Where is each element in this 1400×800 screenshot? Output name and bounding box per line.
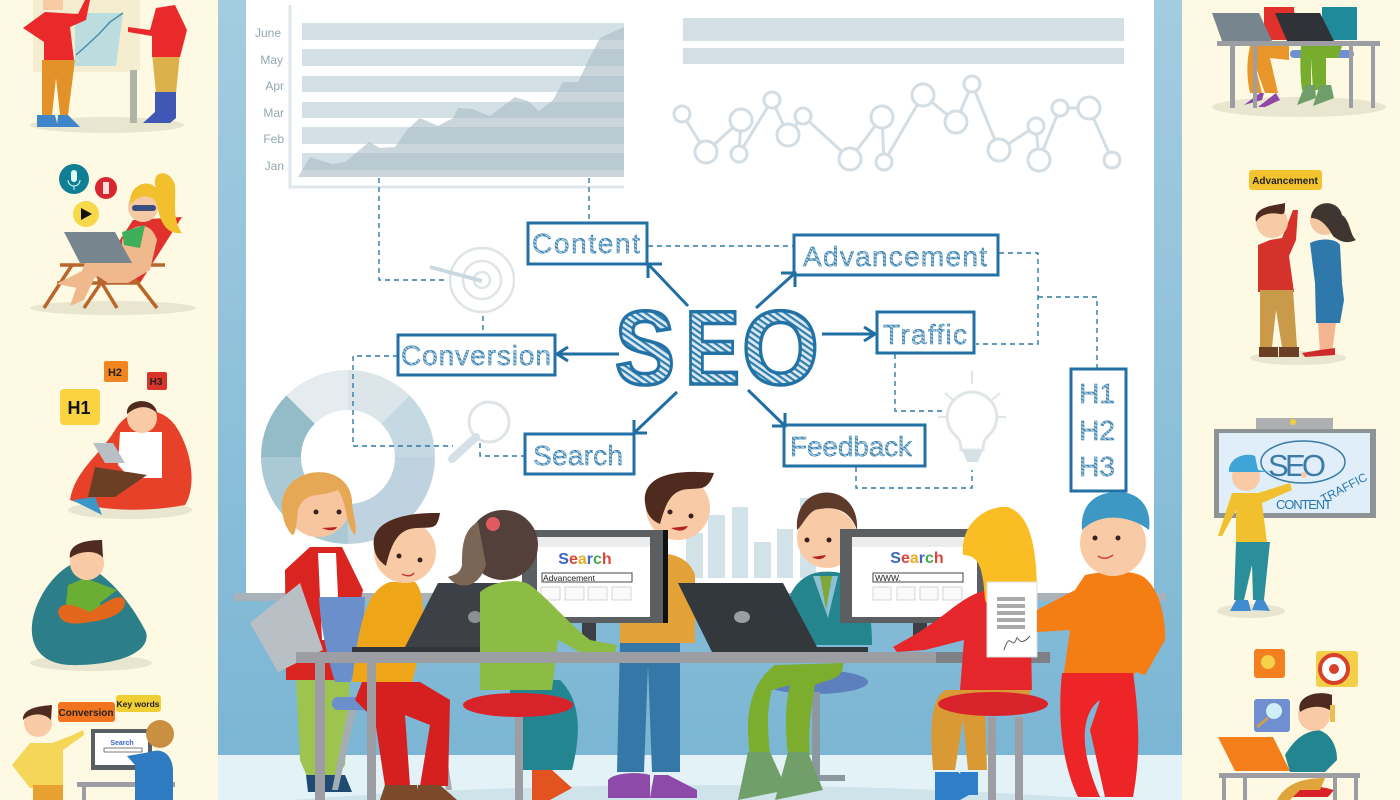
center wall panel <box>218 0 1182 800</box>
SEO title: O <box>742 290 819 407</box>
person: blonde woman red top <box>893 507 1048 800</box>
monitor left <box>522 530 668 649</box>
document <box>987 582 1037 657</box>
left vignette 3: beanbag H1 H2 H3: H1 <box>67 398 91 418</box>
label: H1 H2 H3: H1 <box>1079 378 1115 409</box>
area chart: June <box>255 26 281 40</box>
person: boy yellow sweater <box>352 513 457 800</box>
laptop dark left <box>352 583 522 652</box>
area chart: Feb <box>263 132 284 146</box>
right vignette 4: support operator <box>1218 649 1360 800</box>
chair blue <box>319 597 452 790</box>
left vignette 3: beanbag H1 H2 H3: H3 <box>150 377 163 388</box>
right vignette 3: SEO whiteboard: CONTENT <box>1276 497 1332 512</box>
label: Content <box>528 223 647 264</box>
left vignette 1: chart presentation <box>23 0 187 133</box>
area chart: Mar <box>263 106 284 120</box>
area chart <box>255 5 624 187</box>
SEO title: E <box>685 290 740 407</box>
person: green trousers and stool <box>738 663 868 800</box>
label: Feedback: Feedback <box>790 431 913 462</box>
person: girl green hoodie <box>448 510 617 800</box>
laptop center <box>678 583 868 652</box>
background bar chart <box>686 498 816 578</box>
team scene <box>250 472 1165 800</box>
whiteboard <box>234 0 1166 601</box>
donut chart <box>281 390 415 524</box>
person: standing man <box>608 472 714 798</box>
monitor right: Search <box>890 550 944 567</box>
label: Advancement: Advancement <box>803 241 987 272</box>
icon: target <box>430 248 514 312</box>
label: Traffic: Traffic <box>883 319 967 350</box>
dashed connectors <box>353 178 1097 488</box>
monitor right <box>840 529 986 649</box>
label: Content: Content <box>532 228 640 259</box>
label: Advancement <box>794 235 998 275</box>
left vignette 4: teal beanbag <box>30 540 152 671</box>
area chart: May <box>260 53 283 67</box>
right vignette 3: SEO whiteboard: SEO <box>1268 448 1326 483</box>
folder <box>250 583 323 672</box>
left vignette 5: conversion and key words: Search <box>110 740 134 747</box>
SEO title <box>615 290 819 407</box>
person: man orange sweater <box>1037 492 1165 797</box>
label: H1 H2 H3: H3 <box>1079 451 1115 482</box>
right vignette 1: desk team <box>1212 7 1386 117</box>
label: Conversion: Conversion <box>401 340 551 371</box>
left vignette 3: beanbag H1 H2 H3: H2 <box>108 367 122 379</box>
icon: magnifier <box>452 402 509 459</box>
area chart: Apr <box>265 79 284 93</box>
right vignette 3: SEO whiteboard <box>1214 418 1376 618</box>
left vignette 3: beanbag H1 H2 H3 <box>60 361 192 519</box>
label: H1 H2 H3 <box>1071 369 1126 491</box>
icon: light bulb <box>938 371 1006 462</box>
person: woman red jacket <box>282 472 363 792</box>
label: H1 H2 H3: H2 <box>1079 415 1115 446</box>
area chart: Jan <box>265 159 284 173</box>
right vignette 3: SEO whiteboard: TRAFFIC <box>1318 470 1370 506</box>
monitor left: Search <box>558 551 612 568</box>
arrows from SEO <box>557 264 875 433</box>
monitor right: WWW. <box>875 573 901 583</box>
left vignette 5: conversion and key words: Conversion <box>58 708 114 719</box>
monitor left: Advancement <box>543 573 596 583</box>
label: Feedback <box>784 425 925 466</box>
left vignette 2: woman on deck chair <box>30 164 196 315</box>
person: man teal suit <box>790 492 872 645</box>
line chart <box>674 76 1120 171</box>
label: Search: Search <box>533 440 623 471</box>
desk <box>296 652 1050 800</box>
left vignette 5: conversion and key words <box>12 695 175 800</box>
left vignette 5: conversion and key words: Key words <box>116 699 160 709</box>
SEO title: S <box>615 290 675 407</box>
stool: girl <box>463 693 573 800</box>
label: Search <box>525 434 634 474</box>
right vignette 2: advancement <box>1249 170 1356 365</box>
heading placeholder bars <box>683 18 1124 64</box>
label: Traffic <box>877 312 974 353</box>
right vignette 2: advancement: Advancement <box>1252 176 1318 187</box>
